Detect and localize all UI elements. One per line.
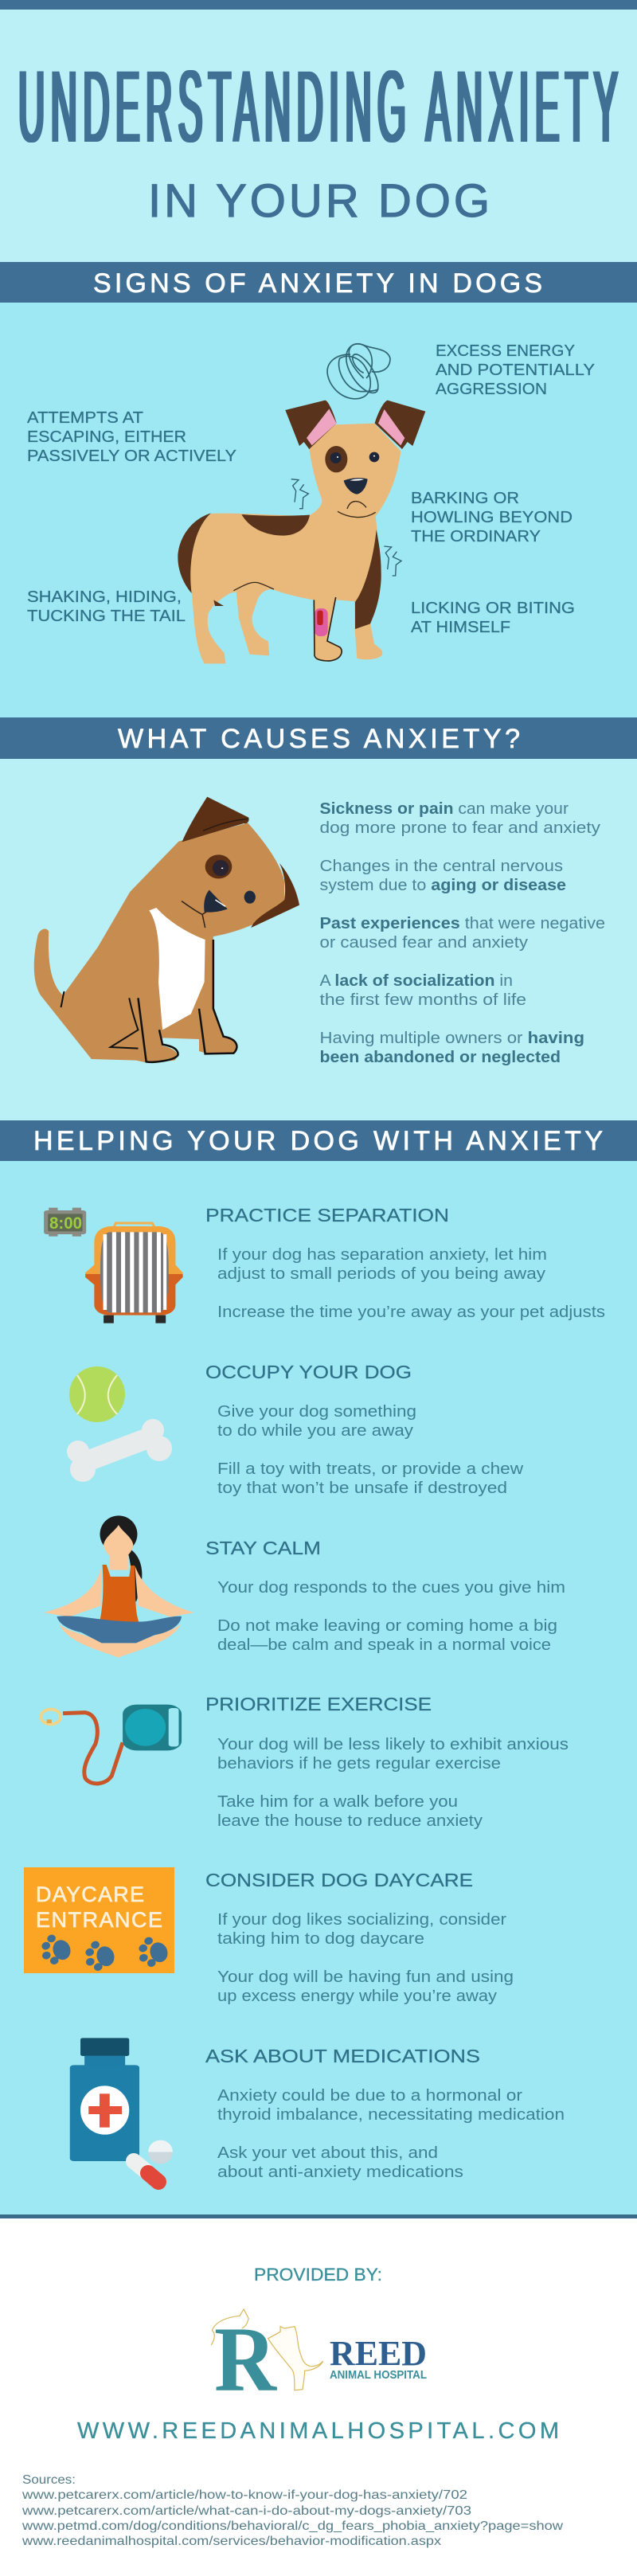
- text: causes list: Having multiple owners or having: [320, 1030, 584, 1047]
- heading: signs of anxiety: [0, 262, 637, 303]
- section: prioritize exercise: [205, 1694, 569, 1830]
- section: stay calm: Your dog responds to the cues you give him: [217, 1579, 565, 1597]
- section: stay calm: [205, 1538, 565, 1654]
- section: consider dog daycare: up excess energy while you’re away: [217, 1988, 497, 2005]
- illustration: sad sitting dog: [34, 797, 299, 1063]
- icon: alarm clock: [44, 1208, 86, 1237]
- icon: dog crate: [85, 1223, 183, 1323]
- sources: www.reedanimalhospital.com/services/behavior-modification.aspx: [21, 2535, 441, 2548]
- section: ask about medications: Ask your vet about this, and: [217, 2144, 438, 2162]
- sign text: escaping: [27, 409, 236, 465]
- sign text: barking: THE ORDINARY: [411, 528, 541, 545]
- section: consider dog daycare: If your dog likes socializing, consider: [217, 1911, 506, 1929]
- logo: Reed Animal Hospital: R: [214, 2308, 277, 2411]
- illustration: anxious standing dog: [178, 344, 425, 663]
- logo: Reed Animal Hospital: [211, 2308, 427, 2411]
- text: causes list: A lack of socialization in: [320, 972, 513, 990]
- sign text: shaking: [27, 588, 186, 625]
- website address: WWW.REEDANIMALHOSPITAL.COM: [77, 2418, 559, 2444]
- sign text: escaping: ESCAPING, EITHER: [27, 428, 186, 446]
- sign text: barking: HOWLING BEYOND: [411, 509, 573, 526]
- icon: alarm clock: 8:00: [49, 1214, 82, 1233]
- section: prioritize exercise: behaviors if he gets regular exercise: [217, 1755, 501, 1773]
- section: consider dog daycare: Your dog will be having fun and using: [217, 1968, 514, 1986]
- icon: daycare entrance sign: ENTRANCE: [36, 1908, 162, 1932]
- heading: what causes anxiety: [0, 717, 637, 759]
- section: occupy your dog: Fill a toy with treats, or provide a chew: [217, 1460, 524, 1478]
- title: [18, 51, 618, 227]
- section: prioritize exercise: PRIORITIZE EXERCISE: [205, 1694, 432, 1714]
- icon: daycare entrance sign: DAYCARE: [36, 1882, 144, 1906]
- section: practice separation: [205, 1205, 605, 1321]
- sign text: licking: [411, 600, 575, 636]
- sign text: excess energy: AGGRESSION: [436, 381, 547, 398]
- text: causes list: Sickness or pain can make your: [320, 800, 569, 818]
- section: practice separation: adjust to small periods of you being away: [217, 1265, 545, 1283]
- title: UNDERSTANDING ANXIETY: [18, 51, 618, 164]
- sources: www.petcarerx.com/article/what-can-i-do-about-my-dogs-anxiety/703: [21, 2504, 471, 2518]
- icon: bone: [67, 1419, 172, 1482]
- sign text: licking: LICKING OR BITING: [411, 600, 575, 617]
- section: ask about medications: [205, 2046, 565, 2181]
- sign text: escaping: ATTEMPTS AT: [27, 409, 143, 427]
- section: ask about medications: about anti-anxiety medications: [217, 2164, 463, 2181]
- text: causes list: or caused fear and anxiety: [320, 934, 528, 952]
- section: prioritize exercise: leave the house to reduce anxiety: [217, 1812, 483, 1830]
- provided by label: PROVIDED BY:: [254, 2265, 382, 2285]
- text: causes list: [320, 800, 605, 1066]
- heading: what causes anxiety: WHAT CAUSES ANXIETY?: [118, 724, 520, 754]
- sources: www.petcarerx.com/article/how-to-know-if-your-dog-has-anxiety/702: [21, 2488, 467, 2502]
- sign text: excess energy: [436, 342, 595, 398]
- text: causes list: been abandoned or neglected: [320, 1049, 561, 1066]
- logo: Reed Animal Hospital: ANIMAL HOSPITAL: [330, 2368, 427, 2382]
- heading: helping your dog: HELPING YOUR DOG WITH ANXIETY: [33, 1126, 603, 1156]
- sources: www.petmd.com/dog/conditions/behavioral/c_dg_fears_phobia_anxiety?page=show: [21, 2519, 564, 2533]
- sign text: shaking: TUCKING THE TAIL: [27, 608, 186, 625]
- section: practice separation: PRACTICE SEPARATION: [205, 1205, 449, 1225]
- logo: Reed Animal Hospital: REED: [330, 2334, 427, 2373]
- section: occupy your dog: Give your dog something: [217, 1403, 416, 1421]
- section: consider dog daycare: CONSIDER DOG DAYCARE: [205, 1870, 473, 1890]
- section: consider dog daycare: [205, 1870, 514, 2005]
- icon: tennis ball: [69, 1366, 125, 1422]
- icon: retractable leash: [41, 1705, 182, 1784]
- section: practice separation: If your dog has separation anxiety, let him: [217, 1246, 547, 1264]
- sign text: shaking: SHAKING, HIDING,: [27, 588, 182, 606]
- section: occupy your dog: toy that won’t be unsafe if destroyed: [217, 1480, 507, 1497]
- section: prioritize exercise: Your dog will be less likely to exhibit anxious: [217, 1736, 569, 1753]
- section: prioritize exercise: Take him for a walk before you: [217, 1793, 458, 1811]
- section: practice separation: Increase the time you’re away as your pet adjusts: [217, 1304, 605, 1321]
- sources: Sources:: [22, 2473, 76, 2487]
- section: occupy your dog: to do while you are away: [217, 1422, 413, 1440]
- sign text: barking: [411, 490, 573, 545]
- sign text: excess energy: EXCESS ENERGY: [436, 342, 575, 360]
- icon: daycare entrance sign: [24, 1867, 174, 1974]
- sign text: licking: AT HIMSELF: [411, 619, 510, 636]
- section: stay calm: Do not make leaving or coming home a big: [217, 1617, 557, 1635]
- section: consider dog daycare: taking him to dog daycare: [217, 1930, 424, 1948]
- section: occupy your dog: [205, 1362, 524, 1497]
- sign text: escaping: PASSIVELY OR ACTIVELY: [27, 448, 236, 465]
- section: ask about medications: Anxiety could be due to a hormonal or: [217, 2087, 522, 2105]
- icon: capsule: [134, 2161, 158, 2182]
- section: ask about medications: thyroid imbalance, necessitating medication: [217, 2106, 565, 2124]
- sign text: barking: BARKING OR: [411, 490, 519, 507]
- text: causes list: the first few months of life: [320, 991, 526, 1009]
- section: stay calm: STAY CALM: [205, 1538, 321, 1558]
- icon: meditating woman: [44, 1515, 194, 1658]
- heading: helping your dog: [0, 1120, 637, 1161]
- title: IN YOUR DOG: [148, 175, 490, 227]
- text: causes list: system due to aging or disease: [320, 877, 566, 894]
- sign text: excess energy: AND POTENTIALLY: [436, 362, 595, 379]
- section: occupy your dog: OCCUPY YOUR DOG: [205, 1362, 412, 1382]
- section: ask about medications: ASK ABOUT MEDICATIONS: [205, 2046, 480, 2066]
- text: causes list: dog more prone to fear and anxiety: [320, 819, 600, 837]
- icon: medicine bottle and pills: [70, 2038, 173, 2164]
- text: causes list: Past experiences that were negative: [320, 915, 605, 932]
- heading: signs of anxiety: SIGNS OF ANXIETY IN DOGS: [93, 268, 542, 299]
- text: causes list: Changes in the central nervous: [320, 858, 563, 875]
- section: stay calm: deal—be calm and speak in a normal voice: [217, 1636, 551, 1654]
- sources: [21, 2473, 564, 2548]
